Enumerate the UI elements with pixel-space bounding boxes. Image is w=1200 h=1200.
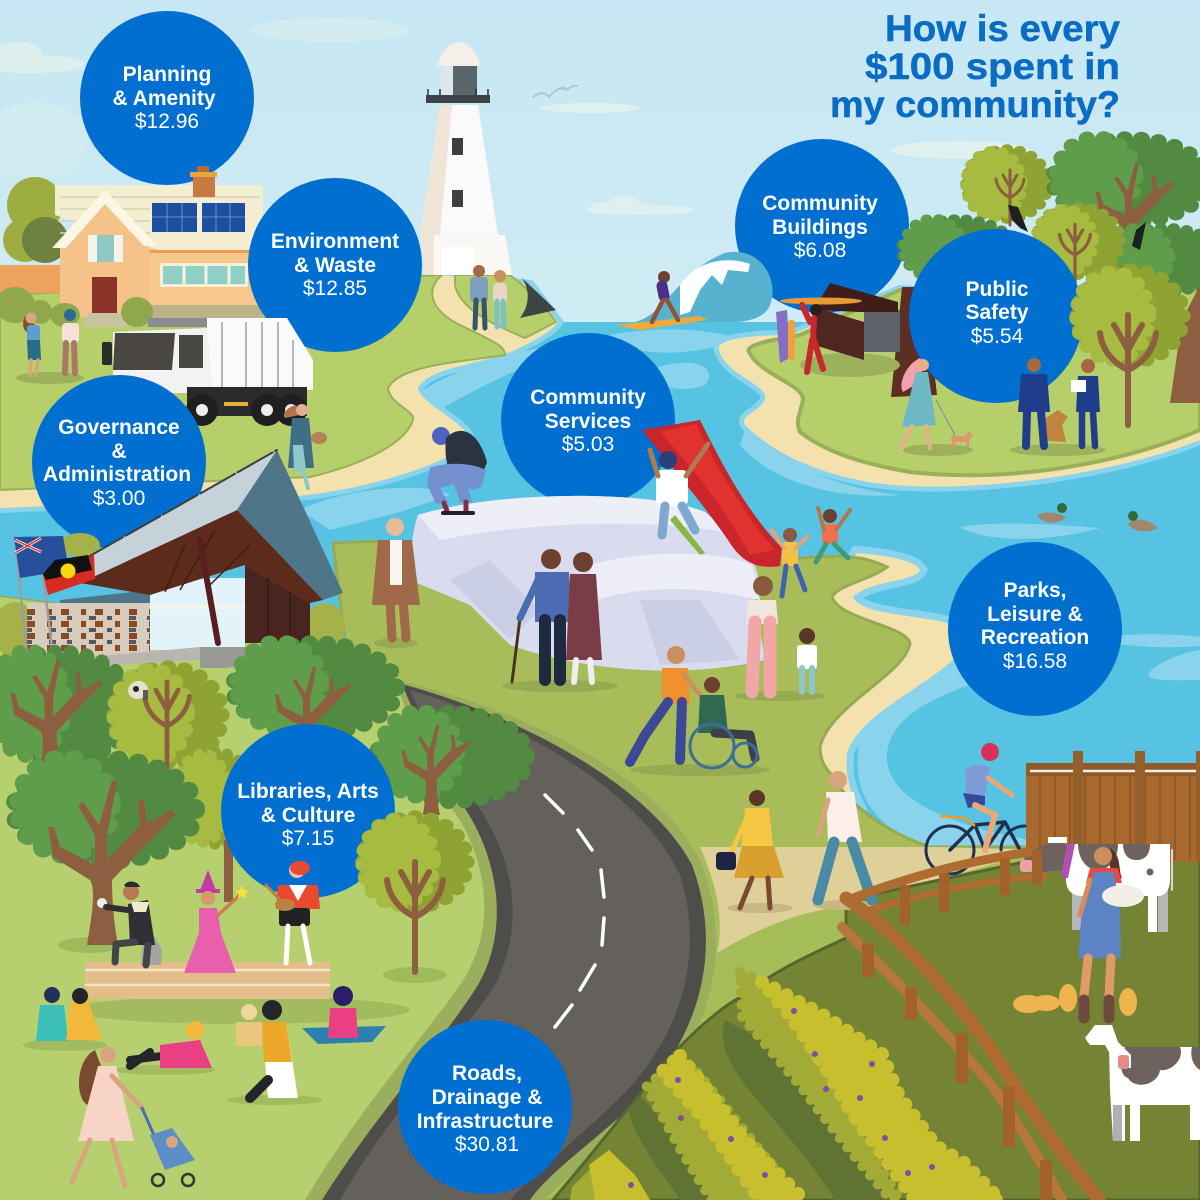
woman with pram — [72, 1047, 195, 1186]
left land sand shore — [0, 275, 558, 508]
title: $100 spent in — [865, 46, 1120, 87]
pavilion tree trunk — [891, 287, 937, 397]
circle: Community Buildings — [735, 139, 909, 313]
person: woman with brown suit — [372, 518, 420, 648]
actor witch in pink gown — [184, 870, 249, 973]
actor with skull — [97, 881, 162, 965]
title — [830, 8, 1120, 125]
circle: Public Safety: $5.54 — [971, 325, 1024, 348]
circle: Planning & Amenity: $12.96 — [135, 110, 199, 133]
circle: Libraries, Arts & Culture — [221, 724, 395, 898]
mother and child — [735, 576, 825, 701]
circle: Environment & Waste: & Waste — [294, 254, 376, 277]
window — [88, 235, 123, 262]
circle: Libraries, Arts & Culture: $7.15 — [282, 827, 334, 850]
circle: Governance & Administration: Administration — [43, 463, 191, 486]
circle: Governance & Administration — [32, 375, 206, 549]
house — [0, 166, 263, 327]
circle: Parks, Leisure & Recreation: Recreation — [981, 626, 1089, 649]
circle: Parks, Leisure & Recreation: Leisure & — [987, 603, 1083, 626]
chimney — [193, 176, 215, 197]
stone wall — [27, 603, 150, 657]
right land grass — [749, 290, 1200, 475]
circle: Planning & Amenity: Planning — [123, 63, 211, 86]
actor with lute — [266, 861, 320, 963]
left land grass — [0, 275, 505, 490]
circle: Parks, Leisure & Recreation: Parks, — [1003, 579, 1067, 602]
distant birds — [533, 86, 577, 97]
solar panels — [152, 203, 197, 232]
circle: Planning & Amenity — [80, 11, 254, 185]
ducks — [1037, 503, 1158, 531]
circle: Governance & Administration: $3.00 — [93, 487, 145, 510]
right land sand shore — [719, 290, 1200, 487]
people near house — [16, 309, 84, 384]
road centre line — [545, 795, 604, 1027]
title: my community? — [830, 84, 1120, 125]
vine rows — [570, 972, 1000, 1200]
light grass strip — [707, 907, 846, 1020]
headland grass — [455, 275, 556, 338]
circle: Public Safety: Safety — [965, 301, 1029, 324]
door — [92, 277, 117, 314]
circle: Environment & Waste: $12.85 — [303, 277, 367, 300]
water highlights — [300, 330, 1200, 850]
person: couple on headland — [470, 265, 507, 328]
circle: Parks, Leisure & Recreation — [948, 542, 1122, 716]
water — [0, 322, 1200, 882]
sky — [0, 0, 1200, 620]
circle: Roads, Drainage & Infrastructure: $30.81 — [455, 1133, 519, 1156]
person: woman walking with bag — [284, 404, 327, 488]
circle: Governance & Administration: Governance — [58, 416, 180, 439]
title: How is every — [885, 8, 1120, 49]
circle: Community Services: Services — [545, 410, 631, 433]
circle: Community Services — [501, 333, 675, 507]
farmer — [1078, 847, 1144, 1018]
wave and surfer — [615, 252, 773, 330]
skate park — [410, 496, 765, 671]
orange fence — [0, 265, 62, 293]
road — [305, 680, 716, 1200]
circle: Community Buildings: $6.08 — [794, 239, 846, 262]
chickens — [1013, 984, 1137, 1016]
stage — [70, 962, 410, 1024]
central and lower land — [0, 541, 1200, 1200]
olive tree front — [1078, 270, 1182, 425]
far right trunk — [1170, 285, 1200, 403]
black cockatoos — [1008, 205, 1146, 250]
circle: Planning & Amenity: & Amenity — [112, 87, 216, 110]
circle: Roads, Drainage & Infrastructure: Roads, — [452, 1062, 522, 1085]
flags — [14, 536, 95, 655]
fence barn — [1026, 751, 1200, 862]
person: police officers and dog — [1010, 358, 1106, 456]
person pushing wheelchair — [630, 646, 770, 776]
children playing — [772, 508, 850, 596]
central sand shore — [810, 553, 958, 800]
circle: Community Buildings: Community — [762, 192, 878, 215]
couple walking on path — [716, 771, 877, 913]
person: woman walking dog — [901, 358, 973, 456]
circle: Roads, Drainage & Infrastructure: Infrastructure — [417, 1110, 553, 1133]
bushes around building — [0, 533, 345, 658]
person: skateboarder on ramp — [427, 427, 487, 515]
circle: Public Safety — [909, 229, 1083, 403]
circle: Roads, Drainage & Infrastructure — [398, 1020, 572, 1194]
vineyard furrows — [628, 1020, 895, 1200]
cow front — [1085, 1025, 1200, 1141]
pavilion — [800, 283, 900, 377]
sand footpath — [700, 847, 1040, 953]
circle: Community Services: $5.03 — [562, 433, 614, 456]
lighthouse — [420, 42, 512, 275]
possum in tree — [126, 679, 150, 701]
building — [27, 450, 343, 668]
grass left of the road — [0, 597, 505, 1200]
circle: Parks, Leisure & Recreation: $16.58 — [1003, 650, 1067, 673]
circle: Governance & Administration: & — [111, 440, 127, 463]
circle: Public Safety: Public — [965, 278, 1029, 301]
circle: Community Services: Community — [530, 386, 646, 409]
circle: Community Buildings: Buildings — [772, 216, 868, 239]
big tree left — [15, 758, 195, 953]
trees behind the Libraries circle — [0, 643, 527, 902]
person: surfboard carrier — [776, 298, 862, 372]
circle: Environment & Waste — [248, 178, 422, 352]
slide — [642, 420, 782, 567]
audience — [23, 986, 386, 1105]
circle: Libraries, Arts & Culture: & Culture — [261, 804, 355, 827]
person: skateboarder on slide — [650, 444, 708, 555]
truck — [102, 318, 313, 426]
cliff rock — [520, 278, 556, 318]
window strip — [160, 263, 248, 287]
trees: right grove — [902, 138, 1200, 291]
elderly couple — [502, 549, 618, 692]
circle: Libraries, Arts & Culture: Libraries, Arts — [237, 780, 379, 803]
tree behind house — [3, 177, 68, 263]
foundation and steps — [150, 305, 263, 319]
farm paddock — [553, 858, 1200, 1200]
wooden fence — [842, 850, 1099, 1200]
clouds — [0, 18, 1030, 215]
bushes — [0, 287, 153, 327]
circle: Environment & Waste: Environment — [271, 230, 399, 253]
cow by barn — [1020, 837, 1172, 932]
circle: Roads, Drainage & Infrastructure: Drainage & — [432, 1086, 542, 1109]
tree beside stage — [363, 817, 467, 983]
cyclist — [926, 743, 1025, 874]
